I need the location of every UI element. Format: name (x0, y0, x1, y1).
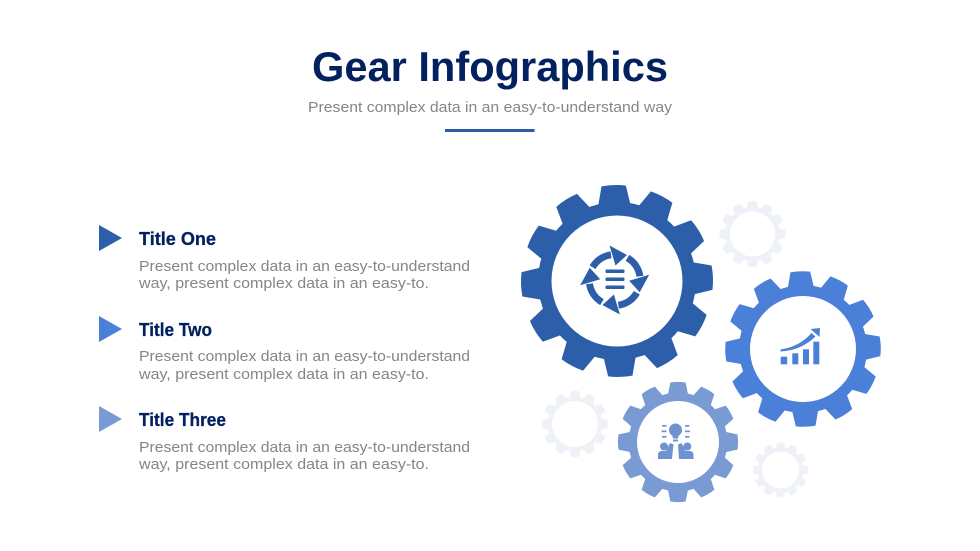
item three (99, 406, 470, 473)
icon: two people with light bulb (658, 424, 694, 459)
item three heading: Title Three (139, 409, 226, 430)
item one heading: Title One (139, 228, 216, 249)
item two text: way, present complex data in an easy-to. (138, 367, 429, 383)
item three text (138, 440, 470, 473)
icon: triangle marker two (99, 316, 122, 342)
item two text: Present complex data in an easy-to-understand (139, 349, 470, 365)
item one text: Present complex data in an easy-to-understand (139, 259, 470, 275)
icon: triangle marker three (99, 406, 122, 432)
light gear top (720, 201, 785, 267)
medium blue gear (723, 269, 883, 429)
icon: triangle marker one (99, 225, 122, 251)
item one (99, 225, 470, 292)
item two (99, 316, 470, 383)
item three text: Present complex data in an easy-to-understand (139, 440, 470, 456)
item two heading: Title Two (139, 319, 212, 340)
item three text: way, present complex data in an easy-to. (138, 457, 429, 473)
item one text (138, 259, 470, 292)
title underline (445, 129, 534, 132)
item two text (138, 349, 470, 383)
light gear left (542, 391, 608, 457)
light gear bottom right (753, 442, 808, 498)
icon: rising bar chart (780, 328, 820, 364)
large dark blue gear (518, 182, 716, 380)
light blue gear (618, 382, 738, 502)
subtitle: Present complex data in an easy-to-understand way (308, 99, 673, 116)
title: Gear Infographics (312, 43, 668, 90)
icon: cycle arrows with list (580, 246, 649, 314)
item one text: way, present complex data in an easy-to. (138, 276, 429, 292)
